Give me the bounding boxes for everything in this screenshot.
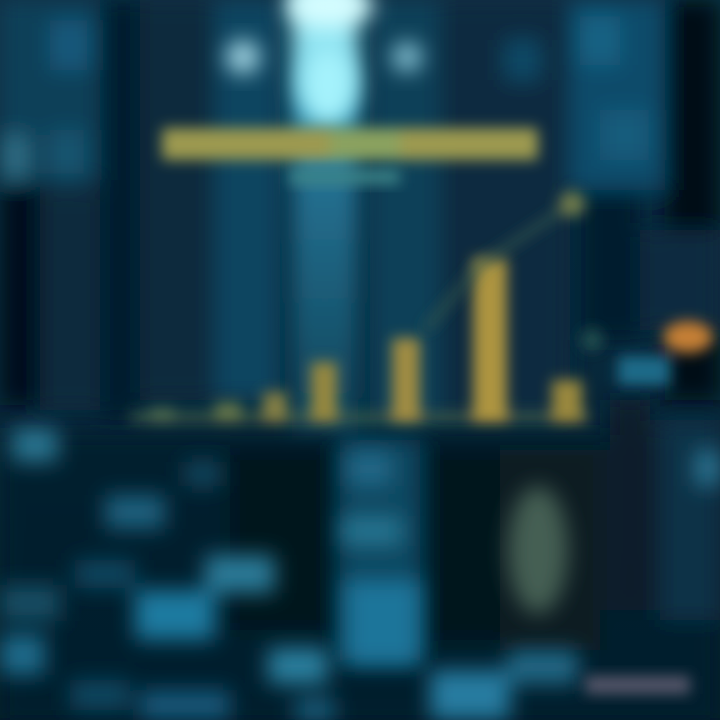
glow spots bbox=[226, 40, 422, 74]
lower cards bbox=[0, 428, 720, 720]
arched panel bbox=[508, 486, 568, 614]
title banner bbox=[162, 128, 538, 160]
bar chart bbox=[130, 258, 590, 424]
central light beam bbox=[286, 0, 374, 440]
bottom-right tinted label bbox=[585, 676, 690, 694]
subtitle glow bbox=[290, 170, 400, 184]
trend arrow bbox=[425, 191, 603, 351]
left towers bbox=[0, 0, 280, 420]
lower section dark base bbox=[0, 400, 720, 720]
baseline bbox=[130, 412, 590, 424]
bars bbox=[150, 408, 174, 424]
right towers bbox=[370, 0, 720, 420]
orange accent bbox=[618, 321, 713, 386]
